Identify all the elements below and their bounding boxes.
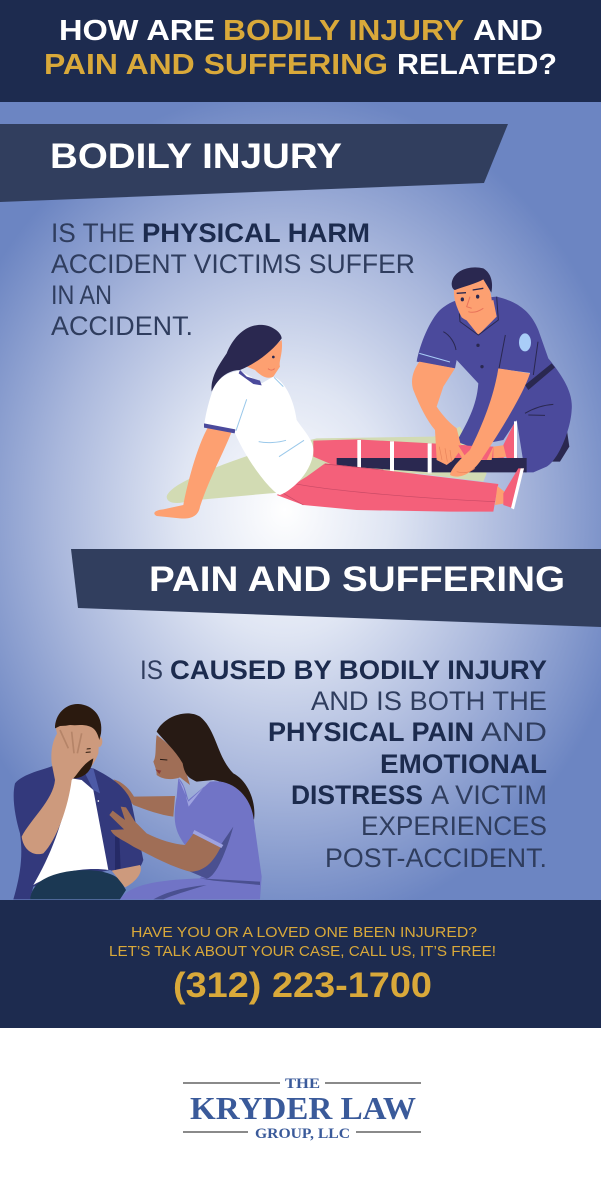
text block: pain and suffering definition: AND IS BOTH THE [311,686,547,716]
text block: pain and suffering definition: EMOTIONAL [380,749,547,779]
text block: bodily injury definition: PHYSICAL HARM [142,218,370,248]
text block: pain and suffering definition: A VICTIM [431,780,547,810]
logo: The Kryder Law Group, LLC: THE [285,1076,320,1092]
title: HOW ARE [59,15,215,47]
call to action band [0,900,601,1028]
text block: pain and suffering definition: AND [481,717,547,747]
banner: pain and suffering [71,549,601,627]
call to action text: LET’S TALK ABOUT YOUR CASE, CALL US, IT’S FREE! [109,943,496,960]
background panel [0,102,601,900]
text block: bodily injury definition [51,218,415,341]
title [44,15,557,81]
header band [0,0,601,102]
title: PAIN AND SUFFERING [44,49,388,81]
text block: pain and suffering definition [140,655,547,873]
banner: bodily injury: BODILY INJURY [50,137,342,176]
logo: The Kryder Law Group, LLC: GROUP, LLC [255,1126,350,1142]
text block: bodily injury definition: IN AN [51,280,112,310]
text block: bodily injury definition: ACCIDENT. [51,311,193,341]
call to action text: HAVE YOU OR A LOVED ONE BEEN INJURED? [131,924,477,941]
call to action text [109,924,496,960]
illustration: paramedic splinting injured woman's leg [154,267,572,519]
phone number: (312) 223-1700 [173,966,432,1005]
text block: bodily injury definition: IS THE [51,218,135,248]
logo: The Kryder Law Group, LLC: KRYDER LAW [190,1090,416,1126]
text block: pain and suffering definition: PHYSICAL PAIN [268,717,474,747]
banner: pain and suffering: PAIN AND SUFFERING [149,560,565,599]
text block: pain and suffering definition: POST-ACCIDENT. [325,843,547,873]
title: BODILY INJURY [223,15,464,47]
text block: pain and suffering definition: EXPERIENCES [361,811,547,841]
banner: bodily injury [0,124,508,202]
text block: bodily injury definition: ACCIDENT VICTIMS SUFFER [51,249,415,279]
text block: pain and suffering definition: IS [140,655,163,685]
title: RELATED? [397,49,557,81]
illustration: woman comforting distressed man [13,704,262,899]
title: AND [473,15,543,47]
text block: pain and suffering definition: CAUSED BY BODILY INJURY [170,655,547,685]
logo: The Kryder Law Group, LLC [183,1076,421,1142]
text block: pain and suffering definition: DISTRESS [291,780,423,810]
